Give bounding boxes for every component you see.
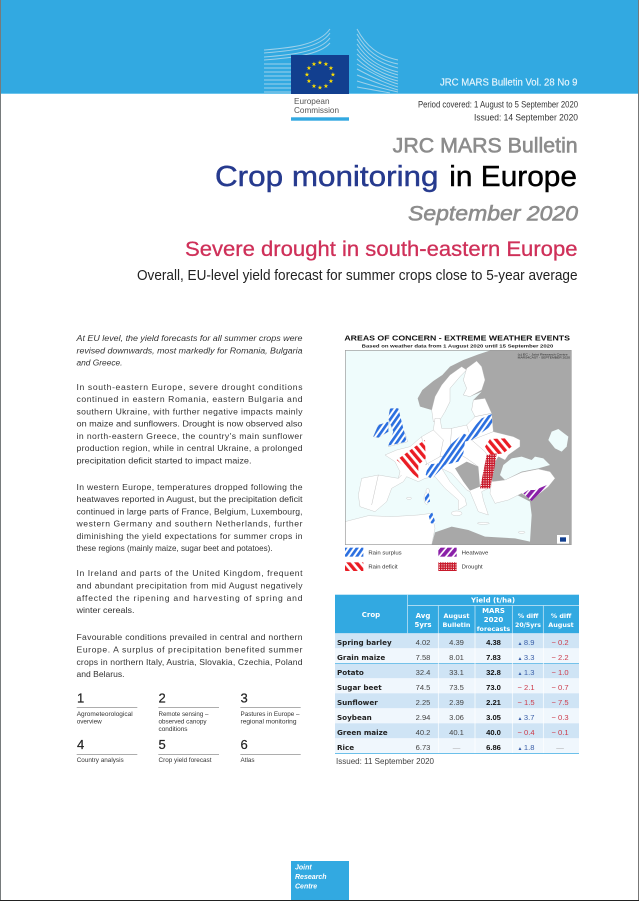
- paragraph: Ireland and United Kingdom: [75, 568, 303, 615]
- paragraph: Ireland and United Kingdom: winter cereals.: [75, 605, 134, 615]
- table header: 2020: [484, 616, 503, 624]
- paragraph: western Europe: heatwaves reported in August, but the precipitation deficit: [76, 494, 303, 504]
- paragraph: south-eastern Europe: on maize and sunflowers. Drought is now observed also: [76, 419, 303, 429]
- icon: EU flag: ★: [306, 78, 312, 85]
- country borders: [372, 425, 493, 505]
- rain deficit areas: [397, 438, 512, 478]
- icon: EU flag: ★: [323, 83, 329, 90]
- contents list: [77, 691, 301, 764]
- period and issue dates: Issued: 14 September 2020: [474, 112, 578, 122]
- main title: in Europe: [449, 161, 577, 193]
- main title: Crop monitoring: [215, 161, 438, 193]
- legend: drought: [438, 562, 483, 571]
- row: spring barley: [337, 638, 569, 647]
- item 1: 1: [77, 691, 84, 706]
- row: sugar beet: Sugar beet: [337, 683, 382, 692]
- row: green maize: − 0.1: [551, 728, 569, 737]
- row: spring barley: 4.39: [449, 638, 464, 647]
- header band: [0, 0, 639, 94]
- icon: EU flag: ★: [323, 61, 329, 68]
- headline: Severe drought in south-eastern Europe: [185, 238, 578, 261]
- map heading: Based on weather data from 1 August 2020 until 15 September 2020: [362, 344, 554, 350]
- legend: heatwave: Heatwave: [462, 550, 488, 556]
- monitored land: [345, 361, 555, 545]
- paragraph: western Europe: continued in large parts of France, Belgium, Luxembourg,: [76, 506, 302, 516]
- row: potato: Potato: [337, 668, 364, 677]
- paragraph: south-eastern Europe: In south-eastern Europe, severe drought conditions: [76, 382, 302, 392]
- subheadline: Overall, EU-level yield forecast for summer crops close to 5-year average: [137, 268, 578, 284]
- row: sunflower: − 1.5: [517, 698, 535, 707]
- row: green maize: 40.2: [416, 728, 430, 737]
- row: grain maize: [337, 653, 569, 662]
- icon: EU flag: ★: [328, 78, 334, 85]
- row: soybean: − 0.3: [551, 713, 569, 722]
- legend: drought: Drought: [462, 564, 483, 570]
- row: rice: Rice: [337, 743, 354, 752]
- item 3: Pastures in Europe –: [240, 711, 300, 718]
- series heading: JRC MARS Bulletin: [393, 134, 578, 157]
- paragraph: Ireland and United Kingdom: In Ireland and parts of the United Kingdom, frequent: [76, 568, 303, 578]
- item 2: observed canopy: [158, 718, 207, 726]
- map panel: areas of concern: [344, 336, 572, 571]
- legend: rain deficit: Rain deficit: [368, 564, 398, 570]
- main title: [215, 161, 577, 193]
- icon: EU flag: ★: [311, 61, 317, 68]
- row: soybean: Soybean: [337, 713, 372, 722]
- period and issue dates: Period covered: 1 August to 5 September 2020: [418, 100, 578, 110]
- row: grain maize: ▲ 3.3: [518, 653, 534, 662]
- map heading: AREAS OF CONCERN - EXTREME WEATHER EVENTS: [344, 336, 570, 343]
- item 5: 5: [158, 737, 166, 752]
- row: soybean: ▲ 3.7: [518, 713, 534, 722]
- icon: EU flag: ★: [317, 60, 323, 66]
- icon: EU flag: ★: [311, 83, 317, 90]
- row: green maize: [337, 728, 569, 737]
- row: grain maize: 7.83: [486, 653, 501, 662]
- intro paragraph: revised downwards, most markedly for Romania, Bulgaria: [76, 345, 303, 355]
- legend: rain surplus: [345, 548, 402, 557]
- row: sunflower: − 7.5: [551, 698, 569, 707]
- heatwave area: [523, 484, 548, 501]
- row: sugar beet: − 0.7: [551, 683, 569, 692]
- table header: % diff: [551, 612, 572, 620]
- European Commission logo text: [291, 97, 349, 121]
- table header: [335, 595, 579, 633]
- row: grain maize: − 2.2: [551, 653, 569, 662]
- row: green maize: − 0.4: [517, 728, 535, 737]
- Joint Research Centre label: Joint: [295, 864, 312, 872]
- item 2: Remote sensing –: [158, 711, 209, 718]
- paragraph: south-eastern Europe: [76, 382, 303, 465]
- table header: Yield (t/ha): [470, 596, 515, 604]
- paragraph: central and northern Europe: crops in northern Italy, Austria, Slovakia, Czechia, Poland: [76, 657, 303, 667]
- table header: forecasts: [477, 625, 510, 633]
- item 6: 6: [240, 737, 248, 752]
- row: potato: 32.4: [416, 668, 430, 677]
- legend: heatwave: [438, 548, 488, 557]
- title block: [137, 134, 578, 284]
- row: spring barley: ▲ 8.9: [518, 638, 534, 647]
- paragraph: central and northern Europe: and Belarus.: [76, 669, 124, 679]
- icon: EU flag: [291, 55, 349, 94]
- map heading: [344, 336, 570, 350]
- seas: [420, 371, 568, 480]
- icon: EU flag: ★: [330, 72, 336, 78]
- row: rice: 6.73: [416, 743, 430, 752]
- row: sugar beet: − 2.1: [517, 683, 535, 692]
- map credit: [518, 354, 570, 358]
- paragraph: south-eastern Europe: production region, while in central Ukraine, a prolonged: [76, 443, 303, 453]
- bulletin volume label: JRC MARS Bulletin Vol. 28 No 9: [440, 78, 578, 89]
- row: soybean: 2.94: [416, 713, 430, 722]
- row: spring barley: 4.02: [416, 638, 430, 647]
- table header: 20/5yrs: [515, 622, 541, 629]
- Joint Research Centre label: Centre: [295, 884, 317, 890]
- row: spring barley: 4.38: [486, 638, 501, 647]
- row: sugar beet: [337, 683, 569, 692]
- row: sunflower: Sunflower: [337, 698, 378, 707]
- map legend: [345, 548, 488, 571]
- item 2: [158, 691, 219, 733]
- paragraph: Ireland and United Kingdom: and abundant precipitation from mid August negatively: [76, 580, 303, 590]
- Berlaymont building graphic: [264, 29, 398, 93]
- paragraph: central and northern Europe: Europe. A surplus of precipitation benefited summer: [76, 644, 303, 654]
- yield forecast table: [335, 595, 579, 754]
- Balkan non-monitored countries: [455, 462, 480, 491]
- icon: EU flag: ★: [306, 65, 312, 72]
- row: spring barley: − 0.2: [551, 638, 569, 647]
- paragraph: south-eastern Europe: continued in eastern Romania, eastern Bulgaria and: [76, 394, 303, 404]
- paragraph: central and northern Europe: [76, 632, 303, 679]
- item 5: [158, 737, 219, 764]
- row: soybean: 3.06: [449, 713, 464, 722]
- item 4: 4: [77, 737, 84, 752]
- paragraph: south-eastern Europe: southern Ukraine, with further negative impacts mainly: [76, 406, 303, 416]
- row: sugar beet: 73.0: [486, 683, 501, 692]
- paragraph: western Europe: In western Europe, temperatures dropped following the: [76, 482, 303, 492]
- row: rice: 6.86: [486, 743, 501, 752]
- icon: EU flag: ★: [304, 72, 310, 78]
- table header: August: [444, 612, 469, 620]
- intro paragraph: and Greece.: [76, 358, 122, 368]
- table header: MARS: [482, 607, 505, 615]
- row: sunflower: 2.39: [449, 698, 464, 707]
- row: rice: —: [556, 743, 564, 752]
- Joint Research Centre label: [291, 861, 349, 900]
- row: potato: [337, 668, 569, 677]
- row: grain maize: 7.58: [416, 653, 430, 662]
- table row backgrounds: [335, 633, 579, 754]
- table header: Avg: [416, 612, 430, 620]
- EU logo on map: [557, 535, 569, 544]
- paragraph: western Europe: western Germany and southern Netherlands, further: [76, 518, 303, 528]
- item 4: [77, 737, 137, 764]
- row: green maize: 40.0: [486, 728, 501, 737]
- intro paragraph: At EU level, the yield forecasts for all summer crops were: [75, 333, 303, 343]
- map credit: (c) EC - Joint Research Centre: [518, 353, 569, 356]
- row: rice: —: [453, 743, 461, 752]
- row: sugar beet: 74.5: [416, 683, 430, 692]
- item 1: overview: [77, 718, 102, 726]
- table header: Crop: [362, 611, 380, 619]
- item 4: Country analysis: [77, 757, 124, 764]
- item 2: 2: [158, 691, 166, 706]
- item 3: [240, 691, 301, 726]
- period and issue dates: [418, 100, 578, 122]
- rain surplus areas: [373, 408, 492, 523]
- row: potato: − 1.0: [551, 668, 569, 677]
- row: potato: ▲ 1.3: [518, 668, 534, 677]
- item 1: [77, 691, 137, 726]
- row: rice: ▲ 1.8: [518, 743, 534, 752]
- map of Europe: [345, 350, 572, 545]
- European Commission logo text: Commission: [294, 106, 339, 115]
- row: sugar beet: 73.5: [449, 683, 464, 692]
- row: spring barley: Spring barley: [337, 638, 392, 647]
- row: sunflower: 2.21: [486, 698, 502, 707]
- icon: EU flag: ★: [317, 84, 323, 92]
- table header: August: [548, 621, 574, 629]
- intro paragraph: [75, 333, 303, 368]
- issue month: September 2020: [408, 203, 578, 226]
- European Commission logo text: European: [294, 97, 330, 106]
- paragraph: south-eastern Europe: in north-eastern Greece, the country's main sunflower: [76, 431, 303, 441]
- paragraph: western Europe: diminishing the yield expectations for summer crops in: [76, 531, 303, 541]
- legend: rain deficit: [345, 562, 398, 571]
- row: grain maize: Grain maize: [337, 653, 385, 662]
- table issue note: Issued: 11 September 2020: [336, 757, 435, 766]
- paragraph: south-eastern Europe: precipitation deficit started to impact maize.: [76, 455, 252, 465]
- item 1: Agrometeorological: [77, 711, 133, 718]
- row: potato: 32.8: [486, 668, 501, 677]
- item 3: 3: [240, 691, 248, 706]
- paragraph: central and northern Europe: Favourable conditions prevailed in central and northern: [76, 632, 303, 642]
- row: green maize: 40.1: [449, 728, 464, 737]
- table header: 5yrs: [414, 621, 432, 629]
- row: sunflower: [337, 698, 569, 707]
- item 2: conditions: [158, 726, 188, 733]
- non-monitored countries: [418, 350, 572, 545]
- paragraph: Ireland and United Kingdom: affected the ripening and harvesting of spring and: [76, 593, 303, 603]
- drought area: [480, 453, 497, 488]
- item 5: Crop yield forecast: [158, 757, 212, 764]
- row: potato: 33.1: [449, 668, 464, 677]
- item 3: regional monitoring: [240, 718, 297, 726]
- paragraph: western Europe: [76, 482, 303, 553]
- table header: % diff: [518, 612, 539, 620]
- row: rice: [337, 743, 564, 752]
- row: sunflower: 2.25: [416, 698, 430, 707]
- Joint Research Centre label: Research: [295, 874, 327, 881]
- legend: rain surplus: Rain surplus: [368, 550, 402, 556]
- row: green maize: Green maize: [337, 728, 388, 737]
- item 6: Atlas: [240, 757, 255, 764]
- row: grain maize: 8.01: [449, 653, 464, 662]
- body text column: [75, 333, 303, 679]
- row: soybean: 3.05: [486, 713, 502, 722]
- map credit: MARS4CAST - SEPTEMBER 2020: [518, 357, 571, 360]
- icon: EU flag: ★: [328, 65, 334, 72]
- row: soybean: [337, 713, 569, 722]
- item 6: [240, 737, 301, 764]
- table header: Bulletin: [443, 621, 471, 629]
- paragraph: western Europe: these regions (mainly maize, sugar beet and potatoes).: [76, 543, 272, 553]
